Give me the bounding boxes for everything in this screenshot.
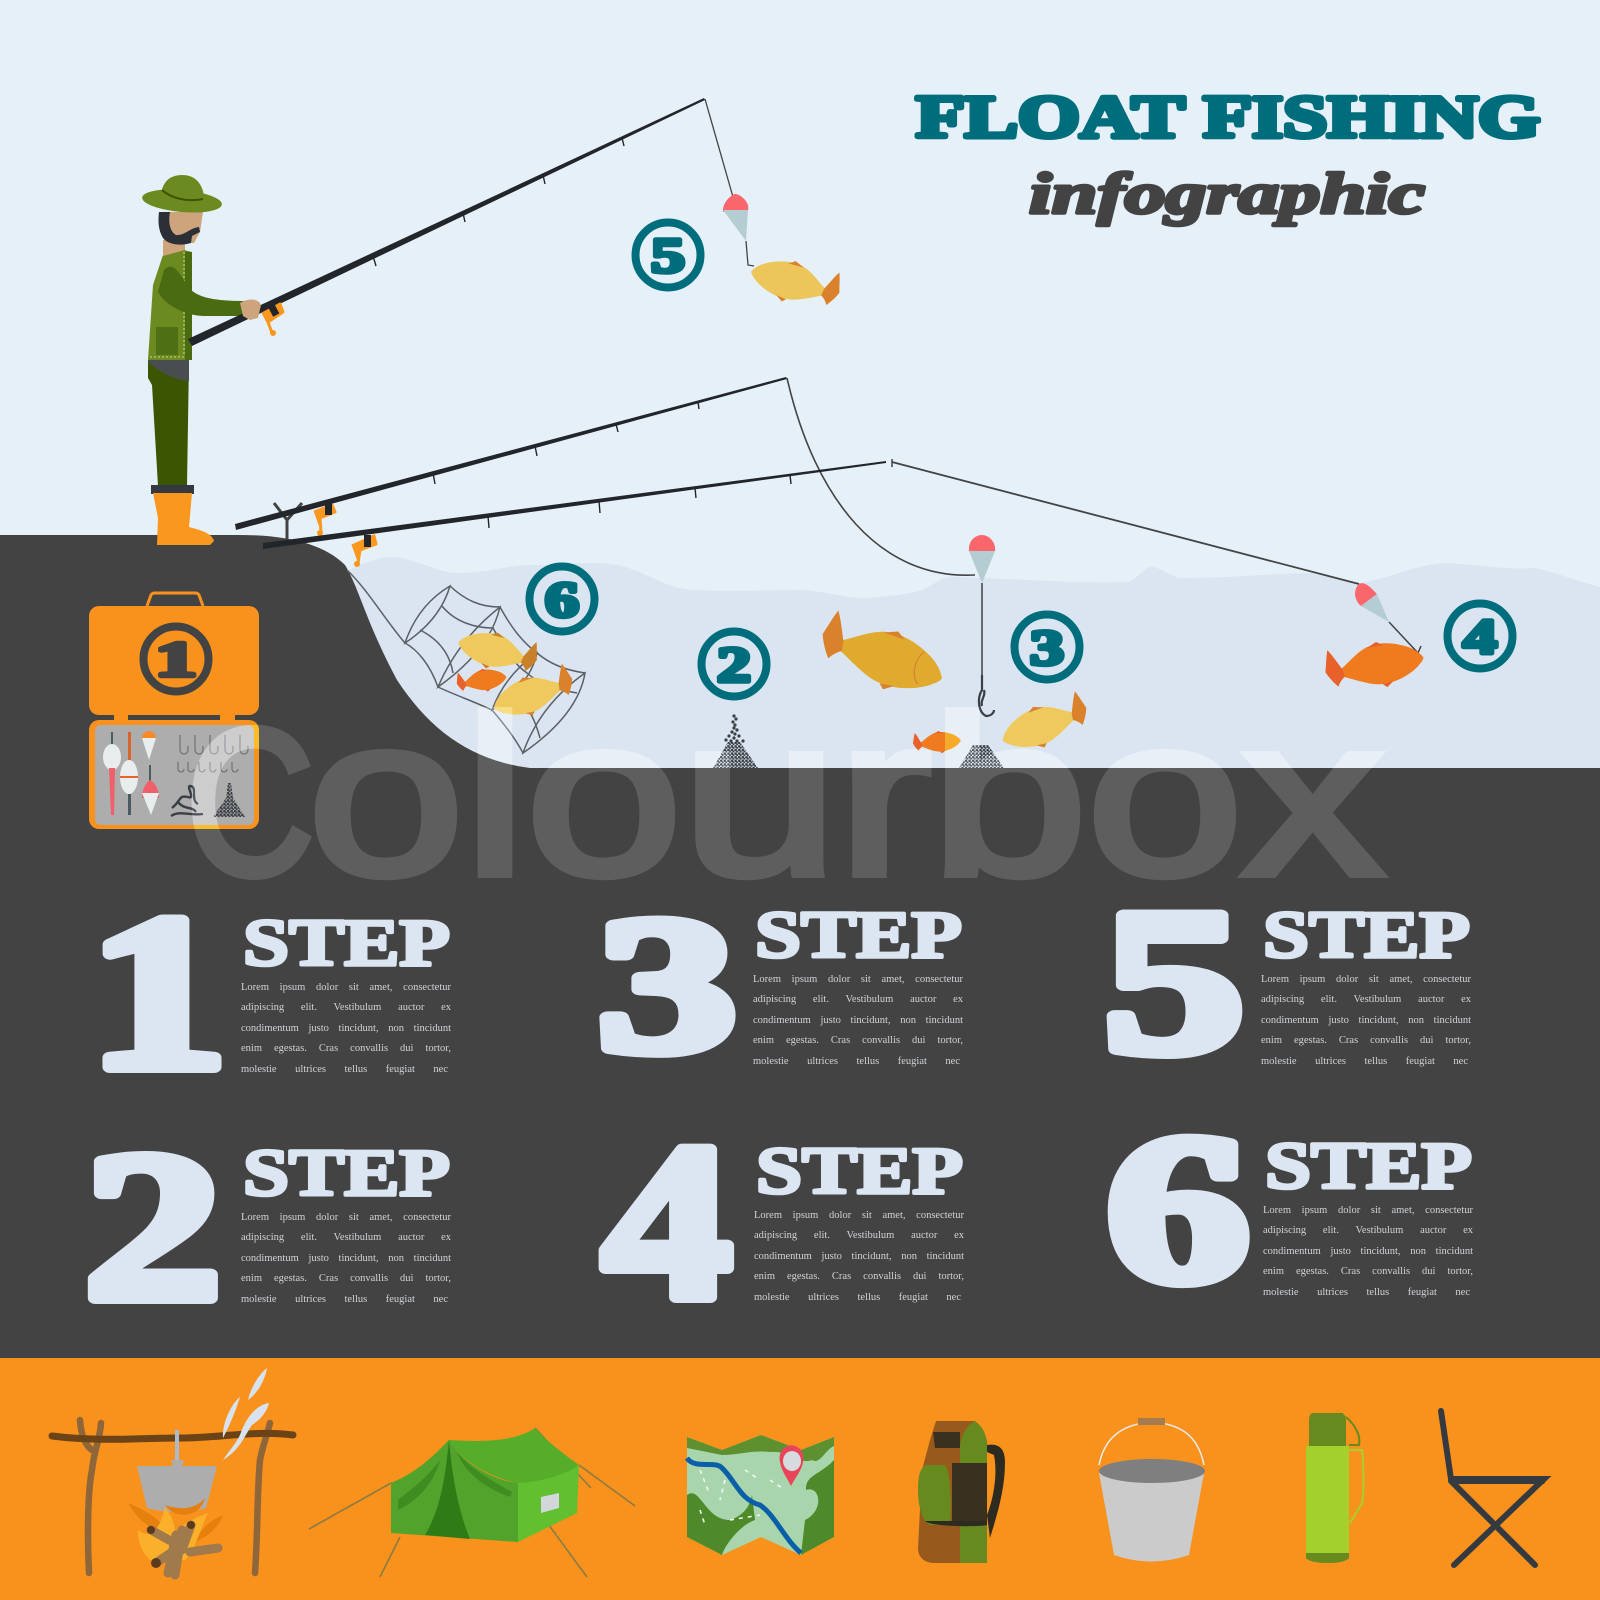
step 6: molestie ultrices tellus feugiat nec [1263,1287,1470,1298]
boot [151,485,214,545]
pants [148,360,189,486]
step 4: enim egestas. Cras convallis dui tortor, [754,1271,964,1282]
step 4: 4 [602,1098,732,1346]
step 5: 5 [1104,867,1244,1096]
icon: bucket [1099,1418,1205,1562]
lower fishing rod [263,459,1359,584]
small orange fish [912,727,962,757]
logs [151,1525,218,1575]
orange bottom band [0,1358,1600,1600]
step 6: condimentum justo tincidunt, non tincidunt [1263,1246,1473,1257]
step 1: adipiscing elit. Vestibulum auctor ex [241,1002,451,1013]
watermark: C [186,687,314,919]
icon: folding chair [1441,1411,1548,1565]
watermark: olourbox [308,670,1383,922]
beard and hair [158,212,200,245]
step 2: condimentum justo tincidunt, non tincidunt [241,1253,451,1264]
step 5: Lorem ipsum dolor sit amet, consectetur [1261,974,1471,985]
float and fish, step 4 [1321,583,1428,700]
step 1: 1 [88,870,228,1116]
flames [128,1498,223,1542]
step 6 badge: 6 [545,571,579,627]
step 3: enim egestas. Cras convallis dui tortor, [753,1035,963,1046]
map pin [780,1445,804,1486]
title: FLOAT FISHING [916,84,1540,150]
bait pile under hook [959,745,1004,768]
step 4: condimentum justo tincidunt, non tincidunt [754,1251,964,1262]
step 3: 3 [598,877,736,1092]
step 6: adipiscing elit. Vestibulum auctor ex [1263,1225,1473,1236]
vest pocket [156,327,178,355]
float and hook, step 3 [969,535,995,716]
step 3 badge: 3 [1030,619,1064,675]
step 1: molestie ultrices tellus feugiat nec [241,1064,448,1075]
icon: map [687,1435,834,1555]
title [916,84,1540,226]
step 3: STEP [755,898,962,972]
step 3: adipiscing elit. Vestibulum auctor ex [753,994,963,1005]
hooked orange fish [1321,630,1428,700]
step 6: 6 [1106,1091,1250,1326]
step 2: enim egestas. Cras convallis dui tortor, [241,1273,451,1284]
bait pile [713,714,758,768]
step 5 [1104,867,1471,1096]
step 6: Lorem ipsum dolor sit amet, consectetur [1263,1205,1473,1216]
step 5: condimentum justo tincidunt, non tincidunt [1261,1015,1471,1026]
step 2: Lorem ipsum dolor sit amet, consectetur [241,1212,451,1223]
step 6 badge [530,566,594,632]
subtitle: infographic [1029,161,1425,226]
icon: backpack [918,1421,1005,1563]
step 6: STEP [1265,1129,1472,1203]
step 4 [602,1098,964,1346]
keep net [347,570,585,753]
step 5: STEP [1263,898,1470,972]
torso [148,250,192,360]
step 1 [88,870,451,1116]
step 1: STEP [243,906,450,980]
hook with worm [979,675,994,716]
icon: thermos [1306,1413,1364,1563]
reel [314,505,335,532]
step 2: adipiscing elit. Vestibulum auctor ex [241,1232,451,1243]
icon: tent [309,1428,635,1577]
step 3 badge [1014,614,1080,680]
step 3 [598,877,963,1092]
step 2: STEP [243,1136,450,1210]
fish in net [454,620,579,725]
reel [262,304,283,333]
arm [158,267,245,316]
step 1: Lorem ipsum dolor sit amet, consectetur [241,982,451,993]
box base [89,720,259,829]
step 1: enim egestas. Cras convallis dui tortor, [241,1043,451,1054]
step 5: molestie ultrices tellus feugiat nec [1261,1056,1468,1067]
tackle box [89,593,259,829]
step 6 [1106,1091,1473,1326]
step 5: enim egestas. Cras convallis dui tortor, [1261,1035,1471,1046]
icon: campfire with cooking pot [52,1368,293,1575]
step 5: adipiscing elit. Vestibulum auctor ex [1261,994,1471,1005]
step 2 badge: 2 [717,636,751,692]
box handle [147,593,203,606]
pale golden fish [995,690,1094,759]
step 1 badge [144,626,208,692]
box lid [89,606,259,715]
fish [745,247,845,318]
step 3: Lorem ipsum dolor sit amet, consectetur [753,974,963,985]
step 3: condimentum justo tincidunt, non tincidunt [753,1015,963,1026]
large golden fish [813,608,952,704]
step 4 badge [1448,604,1512,668]
step 6: enim egestas. Cras convallis dui tortor, [1263,1266,1473,1277]
step 1: condimentum justo tincidunt, non tincidunt [241,1023,451,1034]
water [345,557,1600,770]
step 2: molestie ultrices tellus feugiat nec [241,1294,448,1305]
step 3: molestie ultrices tellus feugiat nec [753,1056,960,1067]
neck [163,240,185,256]
reel [352,536,376,563]
tackle box: 1 [155,631,197,687]
step 2: 2 [84,1109,222,1345]
hinges [114,714,235,721]
rod stand [274,503,302,540]
belt [148,360,189,381]
floats [103,731,159,815]
hat [141,175,223,215]
hooks [178,735,248,772]
step 4: molestie ultrices tellus feugiat nec [754,1292,961,1303]
step 2 badge [702,632,766,696]
worms [171,786,203,816]
face [165,212,203,243]
step 5 badge [636,222,700,288]
upper fishing rod [188,98,733,346]
step 2 [84,1109,451,1345]
bait pile [213,783,245,817]
hand [240,299,261,320]
step 4 badge: 4 [1463,608,1497,664]
step 4: adipiscing elit. Vestibulum auctor ex [754,1230,964,1241]
middle fishing rod [235,377,975,575]
step 4: Lorem ipsum dolor sit amet, consectetur [754,1210,964,1221]
fisherman [141,175,245,486]
steam [223,1368,269,1460]
step 4: STEP [756,1134,963,1208]
step 5 badge: 5 [651,227,685,283]
ground and dark information panel [0,535,1600,1360]
float with hooked fish, step 5 [723,194,845,318]
